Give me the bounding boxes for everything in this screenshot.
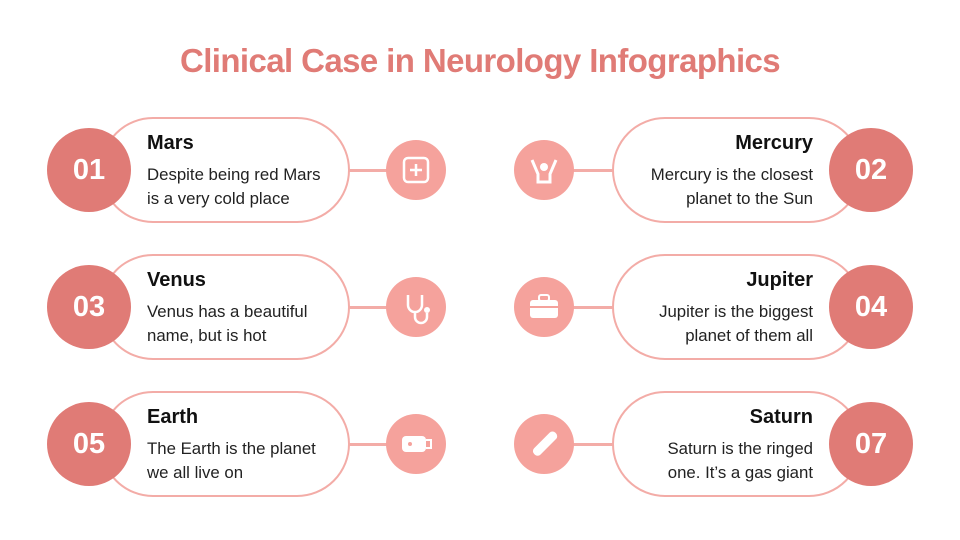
- text: The Earth is the planet: [147, 439, 316, 458]
- pill: [100, 117, 350, 223]
- number 05: 05: [73, 428, 105, 460]
- pill: [612, 117, 862, 223]
- item: Mercury: [514, 117, 913, 223]
- text: [659, 302, 813, 345]
- number 07: 07: [855, 428, 887, 460]
- text: planet of them all: [685, 326, 813, 345]
- text: Saturn is the ringed: [667, 439, 813, 458]
- pill: [612, 391, 862, 497]
- heading: Venus: [147, 269, 206, 291]
- text: is a very cold place: [147, 189, 290, 208]
- connector: [563, 169, 613, 172]
- number 02: [829, 128, 913, 212]
- connector: [347, 169, 397, 172]
- heading: Jupiter: [746, 269, 813, 291]
- connector: [347, 306, 397, 308]
- icon: hands: [514, 140, 574, 200]
- item: Jupiter: [514, 254, 913, 360]
- icon: medical box: [386, 140, 446, 200]
- text: [147, 439, 316, 482]
- pill: [100, 254, 350, 360]
- number 03: [47, 265, 131, 349]
- item: Mars: [47, 117, 446, 223]
- heading: Mercury: [735, 132, 813, 154]
- item: Saturn: [514, 391, 913, 497]
- number 02: 02: [855, 154, 887, 186]
- text: Mercury is the closest: [651, 165, 813, 184]
- number 01: 01: [73, 154, 105, 186]
- icon: toolbox: [514, 277, 574, 337]
- number 04: 04: [855, 291, 887, 323]
- connector: [563, 443, 613, 446]
- text: Despite being red Mars: [147, 165, 320, 184]
- icon: bandage: [386, 414, 446, 474]
- item: Earth: [47, 391, 446, 497]
- number 01: [47, 128, 131, 212]
- text: name, but is hot: [147, 326, 266, 345]
- pill: [100, 391, 350, 497]
- title: Clinical Case in Neurology Infographics: [180, 42, 780, 79]
- text: [667, 439, 813, 482]
- number 05: [47, 402, 131, 486]
- connector: [347, 443, 397, 446]
- icon: test tube: [514, 414, 574, 474]
- text: planet to the Sun: [686, 189, 813, 208]
- number 04: [829, 265, 913, 349]
- text: [147, 165, 320, 208]
- heading: Saturn: [750, 406, 813, 428]
- heading: Mars: [147, 132, 194, 154]
- text: Venus has a beautiful: [147, 302, 307, 321]
- number 07: [829, 402, 913, 486]
- text: we all live on: [147, 463, 243, 482]
- text: [147, 302, 307, 345]
- text: one. It’s a gas giant: [668, 463, 813, 482]
- icon: stethoscope: [386, 277, 446, 337]
- number 03: 03: [73, 291, 105, 323]
- text: Jupiter is the biggest: [659, 302, 813, 321]
- heading: Earth: [147, 406, 198, 428]
- item: Venus: [47, 254, 446, 360]
- pill: [612, 254, 862, 360]
- text: [651, 165, 813, 208]
- connector: [563, 306, 613, 308]
